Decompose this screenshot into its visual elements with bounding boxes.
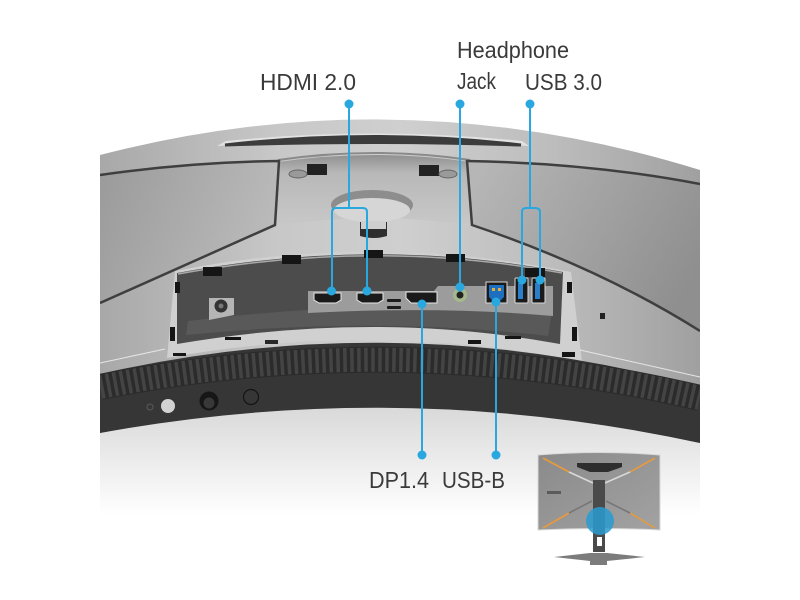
USB-A port 1 xyxy=(515,278,528,303)
DC power socket xyxy=(209,298,234,320)
headphone jack xyxy=(453,288,467,302)
thumbnail highlight circle xyxy=(586,507,614,535)
gradient floor below monitor xyxy=(100,405,700,515)
USB 3.0 leader xyxy=(522,104,540,281)
label: Headphone Jack xyxy=(457,37,569,94)
thumbnail light strips xyxy=(543,458,655,528)
stand opening xyxy=(331,190,413,211)
lower ledge xyxy=(186,310,551,336)
USB-B port xyxy=(486,282,507,303)
thumbnail brand mark xyxy=(547,491,561,494)
headphone leader xyxy=(459,104,461,288)
top vent xyxy=(217,134,529,146)
label: USB-B: USB-B xyxy=(442,467,505,493)
monitor shell xyxy=(100,119,700,443)
label: HDMI 2.0: HDMI 2.0 xyxy=(260,69,356,95)
label: Headphone Jack: Headphone xyxy=(457,37,569,63)
thumbnail stand xyxy=(554,480,645,565)
HDMI port 2 xyxy=(357,293,383,303)
bay tabs xyxy=(170,250,577,357)
port bay xyxy=(170,250,577,357)
mounting tabs xyxy=(307,164,327,175)
label: Headphone Jack: Jack xyxy=(457,68,496,94)
side trim lines xyxy=(100,349,165,363)
connector strip xyxy=(308,286,553,316)
monitor rear view xyxy=(100,119,700,443)
thumbnail screen back xyxy=(538,452,660,530)
USB-A port 2 xyxy=(532,278,545,303)
slots xyxy=(387,299,401,309)
callout dots xyxy=(327,100,544,460)
lower dark band xyxy=(100,343,700,443)
USB-B leader xyxy=(495,302,497,455)
lock slot xyxy=(600,313,605,319)
thumbnail vent xyxy=(577,463,622,472)
port bay frame xyxy=(167,252,582,362)
centre stand plate xyxy=(276,153,472,238)
label: DP1.4: DP1.4 xyxy=(369,467,429,493)
HDMI 2.0 leader xyxy=(332,104,367,291)
callout lines xyxy=(332,104,540,455)
HDMI port 1 xyxy=(314,293,341,303)
left back panel xyxy=(100,161,279,303)
control buttons xyxy=(147,390,258,413)
cable clip xyxy=(360,222,387,238)
locator thumbnail xyxy=(538,452,660,565)
DisplayPort xyxy=(406,292,437,303)
label: USB 3.0: USB 3.0 xyxy=(525,69,602,95)
grille xyxy=(100,360,700,398)
right back panel xyxy=(467,161,700,331)
DP leader xyxy=(421,304,423,455)
